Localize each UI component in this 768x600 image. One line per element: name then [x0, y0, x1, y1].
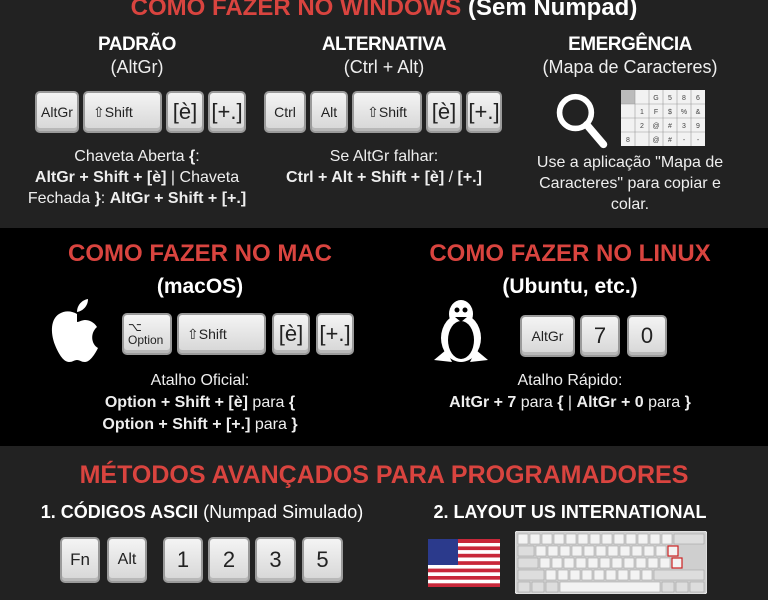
icon: character grid: - — [697, 137, 700, 144]
keys: option shift e plus: [+.] — [319, 321, 351, 346]
panel: padrao — [28, 32, 246, 207]
keys: altgr 7 0: AltGr — [532, 328, 563, 344]
keys: option shift e plus: Option — [128, 333, 163, 347]
heading: padrao: PADRÃO — [98, 34, 176, 55]
keys: ctrl alt shift e plus: [è] — [432, 99, 456, 124]
icon: keyboard — [515, 531, 707, 594]
keys: ctrl alt shift e plus: [+.] — [468, 99, 500, 124]
keys: altgr shift e plus: [è] — [173, 99, 197, 124]
keys: option shift e plus: [è] — [279, 321, 303, 346]
keys: altgr shift e plus — [35, 91, 246, 133]
middle black band — [0, 228, 768, 446]
text: mac instructions — [102, 372, 298, 433]
subheading macos: (macOS) — [157, 275, 243, 298]
text: padrao instructions: Chaveta Aberta {: — [74, 148, 200, 165]
keys: altgr shift e plus: ⇧Shift — [93, 104, 133, 120]
icon: character grid: # — [668, 137, 672, 144]
text: linux instructions: Atalho Rápido: — [518, 372, 622, 389]
heading: ascii: 1. CÓDIGOS ASCII (Numpad Simulado) — [41, 502, 363, 522]
keys: ctrl alt shift e plus: ⇧Shift — [367, 104, 407, 120]
keys: fn alt 1 2 3 5 — [60, 537, 343, 583]
icon: character grid: 3 — [682, 123, 686, 130]
text: mac instructions: Option + Shift + [è] para { — [105, 394, 295, 411]
keys: altgr 7 0: 0 — [641, 323, 653, 348]
icon: character grid: 5 — [668, 95, 672, 102]
text: mac instructions: Option + Shift + [+.] para } — [102, 416, 298, 433]
keys: ctrl alt shift e plus: Alt — [321, 104, 337, 120]
text: alternativa instructions: Ctrl + Alt + Shift + [è] / [+.] — [286, 169, 482, 186]
icon: character grid: 6 — [696, 95, 700, 102]
panel: us international — [428, 502, 707, 594]
icon: character grid: % — [681, 109, 687, 116]
keys: altgr 7 0 — [520, 315, 667, 357]
icon: magnifier — [556, 94, 608, 148]
icon: character grid: 9 — [696, 123, 700, 130]
keys: fn alt 1 2 3 5: 3 — [269, 547, 282, 572]
keys: altgr 7 0: 7 — [594, 323, 606, 348]
icon: character grid: 2 — [640, 123, 644, 130]
panel: mac — [52, 240, 354, 433]
icon: character grid: 8 — [682, 95, 686, 102]
text: emergencia instructions: colar. — [611, 196, 649, 213]
icon: penguin — [434, 300, 488, 362]
panel: ascii codes — [41, 501, 363, 583]
icon: character grid: @ — [652, 123, 660, 130]
icon: character grid: - — [683, 137, 686, 144]
text: mac instructions: Atalho Oficial: — [151, 372, 249, 389]
heading: linux: COMO FAZER NO LINUX — [429, 240, 711, 267]
icon: character grid: & — [696, 109, 701, 116]
icon: character grid: @ — [652, 137, 660, 144]
heading: emergencia: EMERGÊNCIA — [568, 34, 692, 55]
subheading altgr: (AltGr) — [110, 57, 164, 77]
icon: character grid: # — [668, 123, 672, 130]
text: emergencia instructions: Use a aplicação "Mapa de — [537, 154, 723, 171]
heading: us international: 2. LAYOUT US INTERNATIONAL — [433, 502, 707, 522]
icon: apple — [52, 299, 98, 362]
keys: ctrl alt shift e plus — [264, 91, 502, 133]
panel: linux — [429, 240, 711, 411]
keys: fn alt 1 2 3 5: 2 — [223, 547, 235, 572]
keys: fn alt 1 2 3 5: 1 — [177, 547, 189, 572]
icon: character grid: $ — [668, 109, 672, 116]
keys: altgr shift e plus: AltGr — [41, 104, 73, 120]
text: linux instructions — [449, 372, 691, 411]
icon: us flag — [428, 539, 500, 587]
text: padrao instructions — [28, 148, 246, 207]
keys: fn alt 1 2 3 5: Fn — [70, 550, 90, 569]
icon: character grid: 8 — [626, 137, 630, 144]
panel: emergencia — [537, 32, 723, 213]
keys: altgr shift e plus: [+.] — [211, 99, 243, 124]
panel: alternativa — [264, 34, 502, 186]
keys: option shift e plus: ⇧Shift — [187, 326, 227, 342]
heading: alternativa: ALTERNATIVA — [322, 34, 446, 55]
subheading ubuntu: (Ubuntu, etc.) — [502, 275, 638, 298]
keys: option shift e plus: ⌥ — [128, 320, 142, 334]
icon: character grid: F — [654, 109, 658, 116]
subheading mapa: (Mapa de Caracteres) — [542, 57, 718, 77]
icon: character grid: G — [653, 95, 659, 102]
text: emergencia instructions: Caracteres" para copiar e — [539, 175, 721, 192]
text: linux instructions: AltGr + 7 para { | AltGr + 0 para } — [449, 394, 691, 411]
heading: mac: COMO FAZER NO MAC — [68, 240, 332, 267]
title: advanced methods: MÉTODOS AVANÇADOS PARA PROGRAMADORES — [80, 461, 688, 489]
subheading ctrl alt: (Ctrl + Alt) — [344, 57, 424, 77]
keys: option shift e plus — [122, 313, 354, 355]
text: padrao instructions: Fechada }: AltGr + Shift + [+.] — [28, 190, 246, 207]
keys: ctrl alt shift e plus: Ctrl — [274, 104, 296, 120]
icon: character grid: 1 — [640, 109, 644, 116]
keys: fn alt 1 2 3 5: Alt — [118, 551, 136, 568]
text: alternativa instructions: Se AltGr falhar: — [330, 148, 438, 165]
icon: character grid — [621, 90, 705, 146]
text: emergencia instructions — [537, 154, 723, 213]
keys: fn alt 1 2 3 5: 5 — [316, 547, 329, 572]
text: padrao instructions: AltGr + Shift + [è] | Chaveta — [35, 169, 239, 186]
text: alternativa instructions — [286, 148, 482, 186]
